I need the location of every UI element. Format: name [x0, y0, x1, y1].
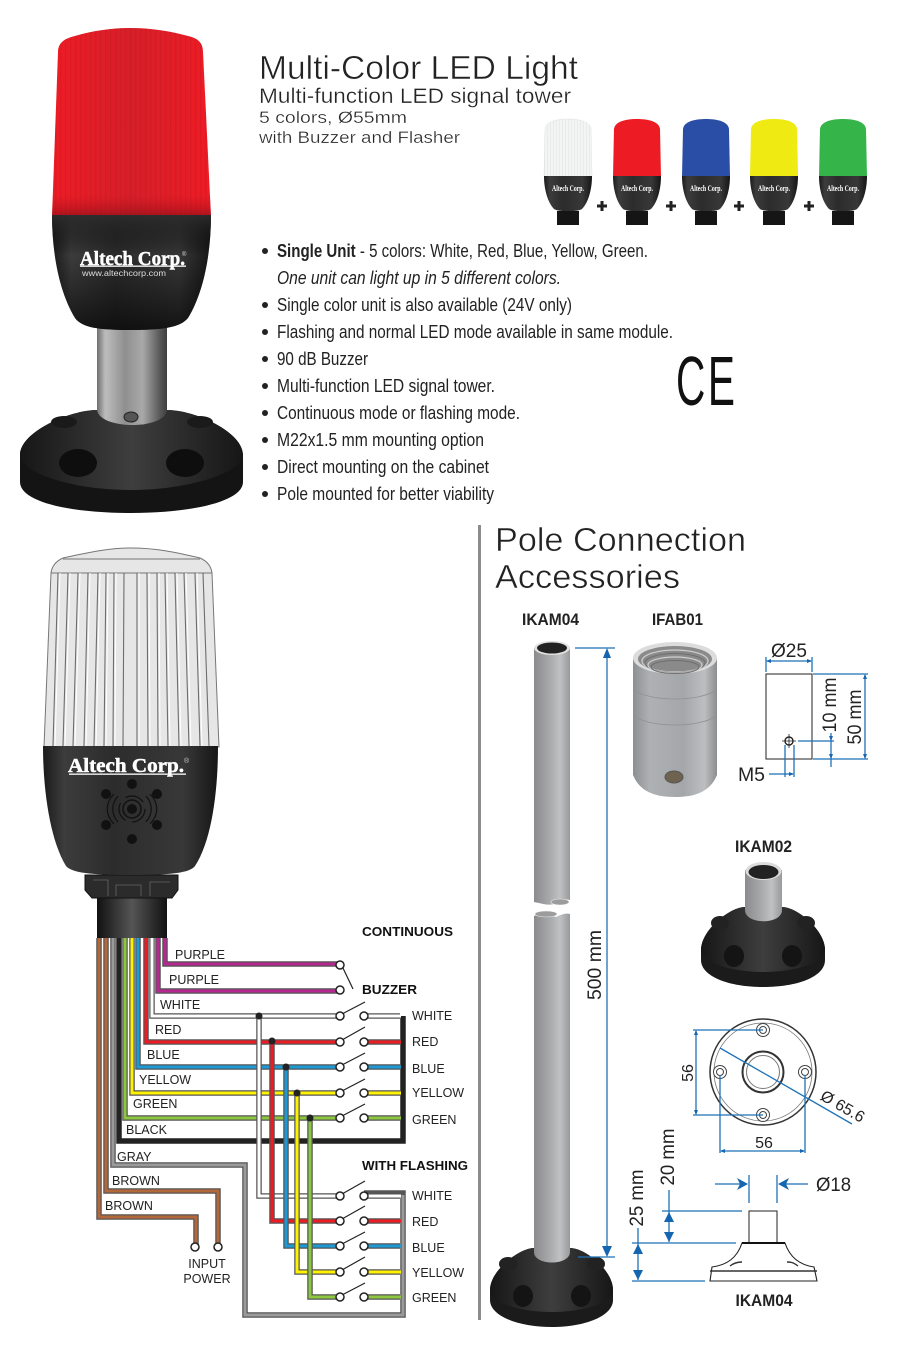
- bullet dots: [262, 248, 268, 497]
- tube: [745, 870, 782, 921]
- steel pole: [97, 325, 167, 425]
- divider: [478, 525, 481, 1320]
- product photo: red signal tower: [20, 28, 243, 513]
- label: 25 mm: 25 mm: [627, 1170, 648, 1226]
- wiring diagram: [99, 924, 468, 1315]
- wire labels, right: WHITE: [412, 1189, 452, 1203]
- accessory: IKAM02 base: [701, 837, 825, 987]
- CE mark: E: [708, 343, 735, 421]
- label: Ø18: Ø18: [816, 1175, 851, 1196]
- bullet text: Flashing and normal LED mode available in same module.: [277, 322, 673, 342]
- base: [701, 907, 825, 987]
- wire labels, right: WHITE: [412, 1009, 452, 1023]
- wire labels, right: RED: [412, 1215, 438, 1229]
- wire labels, left: GREEN: [133, 1097, 177, 1111]
- heading: pole connection accessories: Pole Connection: [495, 521, 746, 558]
- break ellipse upper: [551, 899, 569, 905]
- accessory: IFAB01 coupling: [633, 610, 717, 797]
- wire labels, right: GREEN: [412, 1113, 456, 1127]
- blue tower: [682, 119, 730, 225]
- red tower: Altech Corp.: [621, 184, 653, 193]
- wire labels, right: YELLOW: [412, 1086, 464, 1100]
- subtitle: Multi-function LED signal tower: [259, 85, 571, 108]
- junction dots: [256, 1012, 314, 1122]
- wire labels, left: BLUE: [147, 1048, 180, 1062]
- bullet text: Pole mounted for better viability: [277, 484, 494, 504]
- set screw: [665, 771, 683, 783]
- label: M5: M5: [738, 765, 765, 786]
- wire labels, left: PURPLE: [175, 948, 225, 962]
- feature list: [262, 241, 673, 504]
- wire labels, right: RED: [412, 1035, 438, 1049]
- buzzer heading: BUZZER: [362, 982, 418, 997]
- wiring diagram tower: [43, 548, 219, 938]
- bullet text: M22x1.5 mm mounting option: [277, 430, 484, 450]
- bullet text: Continuous mode or flashing mode.: [277, 403, 520, 423]
- title: Multi-Color LED Light: [259, 49, 578, 86]
- label: IKAM04: IKAM04: [736, 1291, 793, 1310]
- arrowheads: [766, 659, 867, 776]
- CE mark: C: [676, 343, 705, 421]
- label: diameter: Ø25: [771, 641, 807, 662]
- label: 20 mm: 20 mm: [658, 1128, 679, 1186]
- pole opening: [534, 641, 570, 655]
- wire labels, right: GREEN: [412, 1291, 456, 1305]
- wires: [99, 938, 403, 1315]
- blue dimension lines: [632, 1175, 808, 1281]
- logo: ®: [182, 251, 187, 258]
- threaded mouth: [633, 642, 717, 674]
- wire labels, left: RED: [155, 1023, 181, 1037]
- bullet text: Direct mounting on the cabinet: [277, 457, 489, 477]
- input power label: POWER: [183, 1272, 231, 1286]
- bullet text: Multi-function LED signal tower.: [277, 376, 495, 396]
- label: 10 mm: 10 mm: [820, 678, 841, 732]
- outline: [749, 1211, 777, 1243]
- dark housing: [43, 746, 218, 875]
- blue tower: Altech Corp.: [690, 184, 722, 193]
- holes: [711, 916, 815, 967]
- wire labels, left: YELLOW: [139, 1073, 191, 1087]
- white tower: Altech Corp.: [552, 184, 584, 193]
- yellow tower: [750, 119, 798, 225]
- wire labels, left: BLACK: [126, 1123, 168, 1137]
- outer circles: [710, 1019, 816, 1125]
- flared base: [710, 1243, 817, 1281]
- wire labels, left: WHITE: [160, 998, 200, 1012]
- label: diameter: Ø 65.6: [817, 1088, 867, 1127]
- lens ribs: [53, 573, 209, 746]
- black base: [490, 1248, 613, 1327]
- icon: buzzer holes: [101, 779, 162, 844]
- wire labels, right: [412, 1009, 464, 1305]
- set screw: [124, 412, 138, 422]
- single unit note: One unit can light up in 5 different colors.: [277, 268, 561, 288]
- continuous heading: CONTINUOUS: [362, 924, 453, 939]
- bullet text: Single color unit is also available (24V only): [277, 295, 572, 315]
- input power label: INPUT: [188, 1257, 226, 1271]
- arrowheads: [694, 1030, 805, 1153]
- logo: ®: [184, 757, 190, 765]
- blue dimension lines: [766, 657, 868, 777]
- blue dimension lines: [693, 1030, 852, 1153]
- yellow tower: Altech Corp.: [758, 184, 790, 193]
- accessory: IKAM04 pole: [490, 610, 615, 1327]
- sleeve: [97, 896, 167, 938]
- wire labels, left: BROWN: [112, 1174, 160, 1188]
- with flashing heading: WITH FLASHING: [362, 1158, 468, 1173]
- label: IFAB01: [652, 610, 703, 629]
- spec line: buzzer: with Buzzer and Flasher: [258, 128, 460, 147]
- wire labels, right: YELLOW: [412, 1266, 464, 1280]
- input power label: [183, 1257, 231, 1286]
- wire labels, left: PURPLE: [169, 973, 219, 987]
- white lens: [44, 548, 219, 747]
- drawing: IKAM04 top view: [680, 1019, 867, 1153]
- label: 56 horizontal: 56: [755, 1135, 773, 1152]
- green tower: Altech Corp.: [827, 184, 859, 193]
- mounting holes: [714, 1024, 812, 1122]
- color lineup: five towers: [544, 119, 867, 225]
- wire labels, left: GRAY: [117, 1150, 152, 1164]
- black housing: [52, 215, 211, 330]
- black base: [20, 410, 243, 513]
- wire labels, right: BLUE: [412, 1241, 445, 1255]
- label: IKAM04: [522, 610, 579, 629]
- logo: Altech Corp.: [68, 755, 184, 777]
- red tower: [613, 119, 661, 225]
- drawing: IFAB01 dimensions: [738, 641, 868, 786]
- single unit bullet: Single Unit - 5 colors: White, Red, Blue, Yellow, Green.: [277, 241, 648, 261]
- logo: www.altechcorp.com: [81, 268, 166, 278]
- wire labels, left: BROWN: [105, 1199, 153, 1213]
- pole upper: [534, 648, 570, 905]
- red lens: [52, 28, 211, 217]
- title block: [258, 49, 578, 147]
- label: 50 mm: 50 mm: [845, 690, 866, 744]
- pole lower: [534, 914, 570, 1262]
- label: 56 vertical: 56: [680, 1064, 697, 1082]
- heading: pole connection accessories: [495, 521, 746, 595]
- wire labels, left: [105, 948, 225, 1213]
- wire labels, right: BLUE: [412, 1062, 445, 1076]
- green tower: [819, 119, 867, 225]
- bullet text: 90 dB Buzzer: [277, 349, 368, 369]
- tube opening: [746, 862, 782, 880]
- logo: Altech Corp.: [80, 248, 185, 270]
- switches: [191, 961, 368, 1301]
- drawing: IKAM04 side view: [627, 1128, 851, 1310]
- hole: [782, 734, 796, 748]
- heading: pole connection accessories: Accessories: [495, 558, 680, 595]
- spec line: colors: 5 colors, Ø55mm: [259, 108, 407, 127]
- arrowheads: [633, 1178, 789, 1280]
- break ellipse lower: [535, 911, 557, 917]
- outline: [766, 674, 812, 759]
- body: [633, 658, 717, 797]
- connector nut: [85, 875, 178, 898]
- white tower: [544, 119, 592, 225]
- dimension: 500 mm: 500 mm: [585, 930, 606, 1000]
- label: IKAM02: [735, 837, 792, 856]
- dimension: 500 mm: [575, 648, 615, 1257]
- pole foot: [97, 398, 167, 425]
- centre bore: [742, 1052, 784, 1092]
- plus signs: [597, 201, 814, 211]
